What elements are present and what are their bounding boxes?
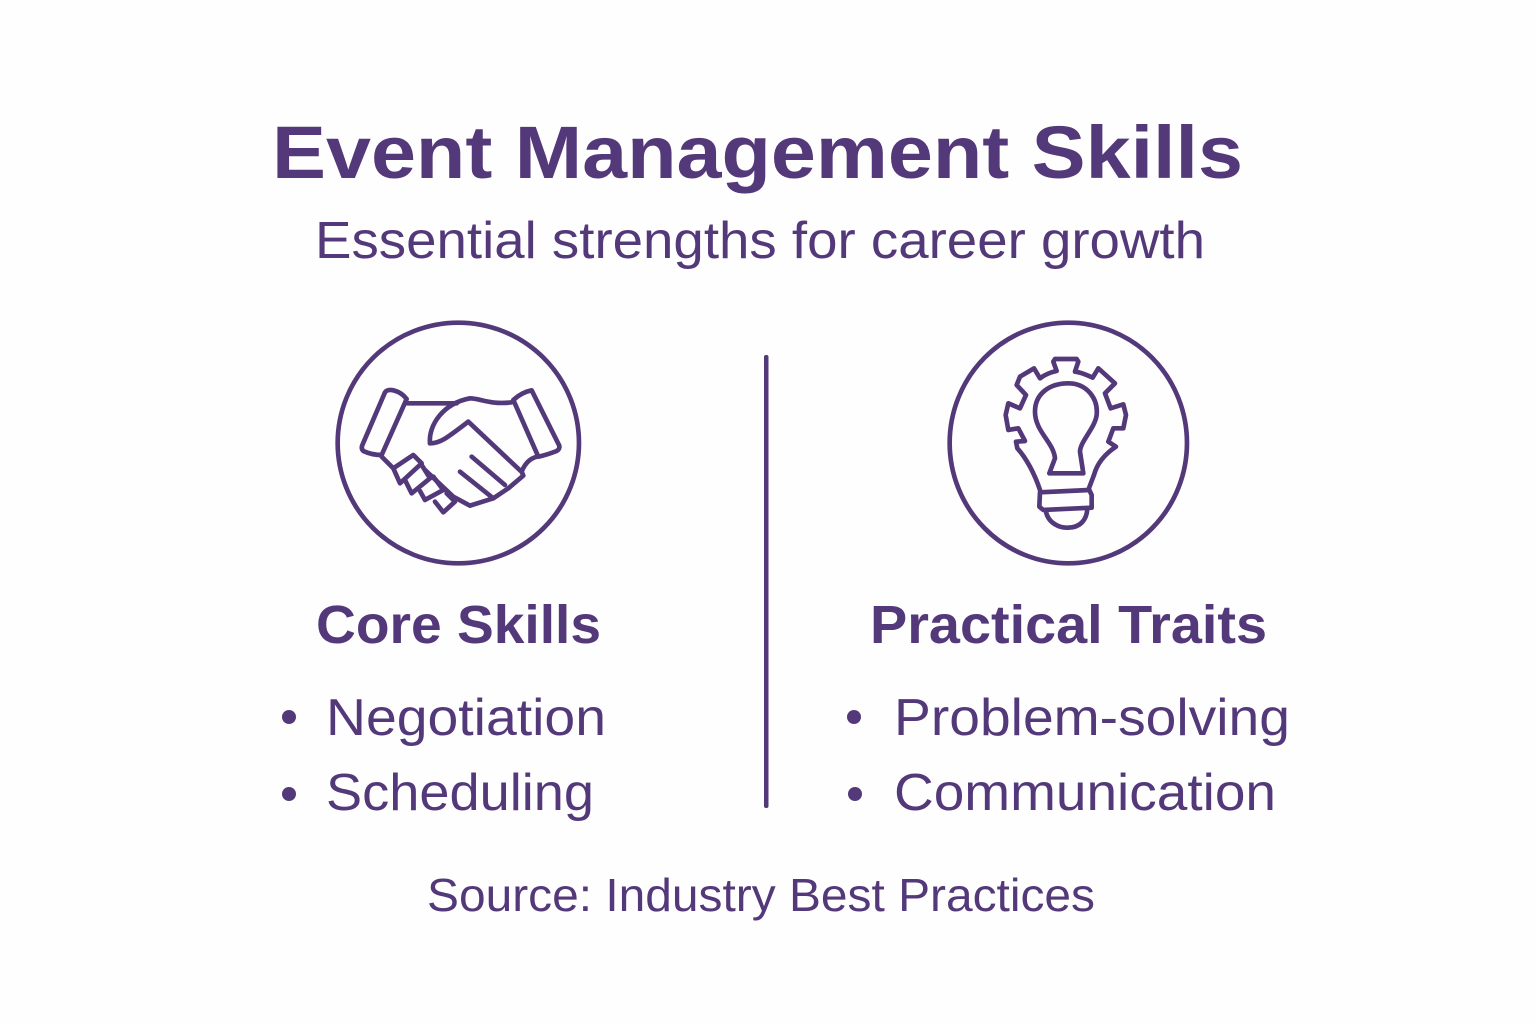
panel: practical traits — [847, 323, 1290, 822]
bullet: scheduling: Scheduling — [326, 764, 594, 822]
icon: light bulb with gear in circle — [950, 323, 1187, 563]
divider — [764, 355, 768, 808]
icon: handshake in circle — [338, 323, 579, 563]
panel: core skills — [282, 323, 606, 822]
bullet: communication: Communication — [894, 764, 1276, 822]
title: Event Management Skills — [272, 111, 1243, 194]
bullet: negotiation: Negotiation — [326, 689, 606, 747]
bullet: problem-solving: Problem-solving — [894, 689, 1290, 747]
subtitle: Essential strengths for career growth — [315, 212, 1205, 270]
heading: core skills: Core Skills — [316, 595, 601, 655]
source note: Source: Industry Best Practices — [427, 869, 1095, 921]
heading: practical traits: Practical Traits — [870, 595, 1267, 655]
